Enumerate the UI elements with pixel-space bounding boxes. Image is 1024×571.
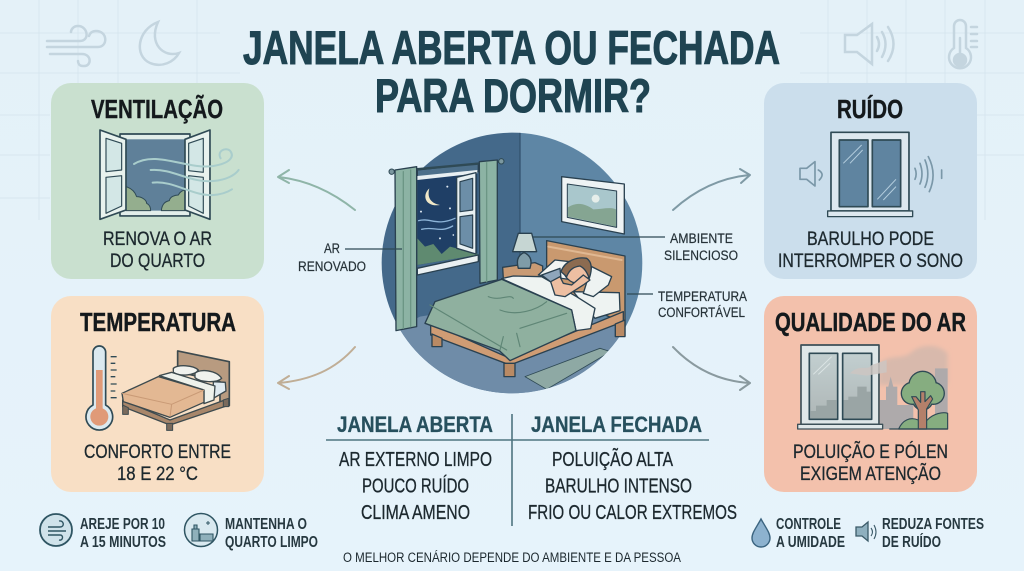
caption: ruído: BARULHO PODE [807, 228, 934, 250]
caption: ruído [778, 228, 963, 272]
icon: window, smog and tree [798, 345, 948, 429]
caption: temperatura [84, 441, 231, 485]
tip: quarto limpo [184, 514, 318, 551]
arrow: to ruído [673, 169, 750, 210]
comparison table [326, 412, 737, 526]
column: janela aberta: CLIMA AMENO [361, 502, 470, 524]
icon: thermometer and bed [86, 346, 229, 430]
column: janela fechada: POLUIÇÃO ALTA [552, 447, 674, 471]
heading: temperatura: TEMPERATURA [80, 309, 236, 337]
column: janela aberta [337, 412, 493, 524]
callout: ar renovado: RENOVADO [298, 259, 366, 274]
caption: temperatura: 18 E 22 °C [117, 463, 198, 485]
caption: ruído: INTERROMPER O SONO [778, 250, 963, 272]
tip: umidade: A UMIDADE [776, 534, 845, 551]
column: janela aberta: AR EXTERNO LIMPO [339, 449, 492, 471]
illustration: sleeping in bedroom [382, 132, 642, 394]
column: janela fechada [528, 412, 737, 524]
heading: qualidade do ar: QUALIDADE DO AR [775, 309, 966, 337]
callout: temperatura confortável [627, 289, 747, 320]
arrow: to temperatura [278, 347, 355, 389]
column: janela fechada: BARULHO INTENSO [545, 476, 692, 498]
title [243, 22, 780, 123]
panel: qualidade do ar [764, 296, 977, 492]
caption: temperatura: CONFORTO ENTRE [84, 441, 231, 463]
arrow: to qualidade do ar [673, 347, 750, 390]
tip: umidade [752, 516, 845, 551]
heading: ventilação: VENTILAÇÃO [91, 94, 223, 124]
callout: temperatura confortável: CONFORTÁVEL [658, 305, 745, 320]
column: janela fechada: JANELA FECHADA [531, 412, 702, 437]
callout: ar renovado [298, 241, 402, 274]
caption: qualidade do ar: POLUIÇÃO E PÓLEN [793, 439, 948, 463]
tip: quarto limpo: QUARTO LIMPO [225, 534, 318, 551]
icon: faint thermometer [949, 20, 977, 68]
panel: ventilação [51, 83, 264, 279]
column: janela aberta: POUCO RUÍDO [362, 474, 469, 498]
icon: open window with wind [100, 130, 239, 219]
arrow: to ventilação [278, 170, 355, 210]
caption: ventilação: DO QUARTO [110, 250, 205, 272]
callout: temperatura confortável: TEMPERATURA [658, 289, 747, 304]
tip: reduzir ruído: REDUZA FONTES [882, 516, 984, 533]
tip: arejar: A 15 MINUTOS [80, 534, 166, 551]
caption: qualidade do ar: EXIGEM ATENÇÃO [800, 461, 941, 485]
icon: closed window with sound [800, 132, 942, 217]
tip: quarto limpo: MANTENHA O [225, 516, 307, 533]
callout: ambiente silencioso: SILENCIOSO [664, 248, 738, 263]
column: janela aberta: JANELA ABERTA [337, 412, 493, 437]
panel: temperatura [51, 296, 264, 492]
footer note: O MELHOR CENÁRIO DEPENDE DO AMBIENTE E DA PESSOA [343, 550, 681, 565]
caption: qualidade do ar [793, 439, 948, 485]
panel: ruído [764, 83, 977, 279]
title: PARA DORMIR? [375, 70, 651, 123]
icon: faint speaker [845, 24, 894, 64]
icon: faint moon [140, 22, 179, 65]
caption: ventilação [103, 228, 212, 272]
wall picture [562, 177, 624, 234]
icon: faint wind [47, 26, 105, 66]
tip: reduzir ruído: DE RUÍDO [882, 534, 941, 551]
title: JANELA ABERTA OU FECHADA [243, 22, 780, 75]
column: janela fechada: FRIO OU CALOR EXTREMOS [528, 502, 737, 524]
callout: ambiente silencioso [533, 231, 738, 263]
heading: ruído: RUÍDO [837, 95, 903, 124]
callout: ambiente silencioso: AMBIENTE [670, 231, 733, 246]
caption: ventilação: RENOVA O AR [103, 228, 212, 250]
callout: ar renovado: AR [324, 241, 340, 256]
tip: arejar [40, 514, 166, 551]
tip: umidade: CONTROLE [776, 516, 841, 533]
tip: reduzir ruído [856, 516, 984, 551]
tip: arejar: AREJE POR 10 [80, 516, 165, 533]
